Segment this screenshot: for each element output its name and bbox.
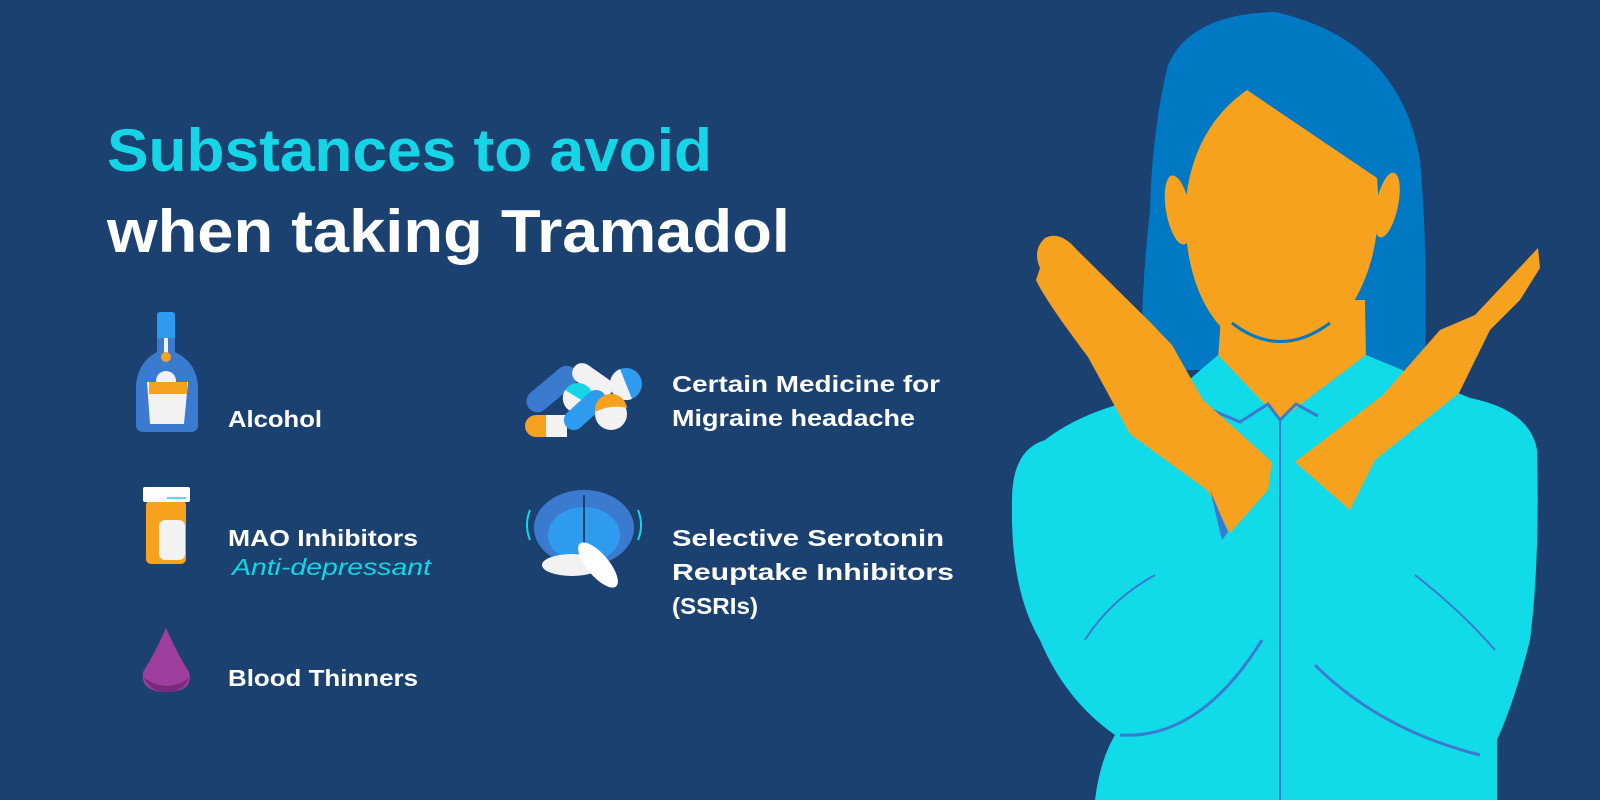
label: SSRIs: (SSRIs) — [672, 593, 758, 619]
label: MAO inhibitors: MAO Inhibitors — [228, 525, 418, 551]
icon: blood drop — [143, 628, 190, 692]
label: SSRIs: Reuptake Inhibitors — [672, 559, 954, 585]
illustration: woman crossing arms — [1012, 12, 1540, 800]
title: Substances to avoid — [107, 117, 712, 184]
label: migraine: Certain Medicine for — [672, 371, 940, 397]
label: MAO inhibitors — [228, 525, 433, 580]
icon: alcohol bottle — [136, 312, 198, 432]
label: migraine — [672, 371, 940, 431]
title — [106, 117, 790, 265]
label: blood thinners: Blood Thinners — [228, 665, 418, 691]
icon: brain with pills — [527, 490, 641, 594]
label: SSRIs — [672, 525, 954, 619]
title: when taking Tramadol — [106, 198, 790, 265]
icon: pills — [522, 359, 642, 437]
icon: pill bottle — [143, 487, 190, 564]
label: MAO inhibitors: Anti-depressant — [230, 554, 433, 580]
label: alcohol: Alcohol — [228, 406, 322, 432]
label: SSRIs: Selective Serotonin — [672, 525, 944, 551]
label: migraine: Migraine headache — [672, 405, 915, 431]
